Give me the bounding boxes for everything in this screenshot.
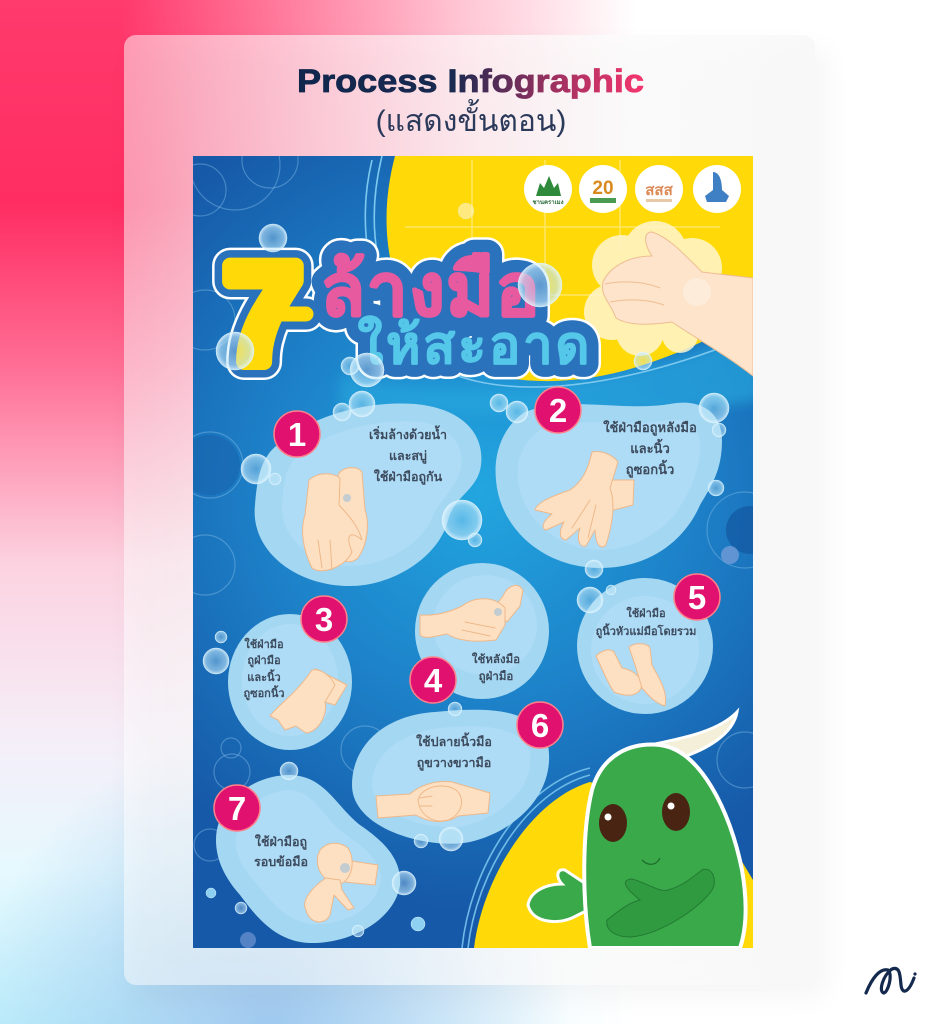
badge 1	[274, 411, 320, 457]
right arm	[607, 869, 714, 937]
bottom wave outlines	[462, 768, 590, 948]
step 1 text: เริ่มล้างด้วยน้ำ	[369, 425, 447, 442]
step 7 text: ใช้ฝ่ามือถู	[255, 834, 307, 850]
step 2 text	[603, 419, 697, 478]
sprout	[632, 712, 737, 758]
step 7 text	[254, 834, 308, 869]
mascot: green bean character	[528, 712, 746, 948]
subtitle: (แสดงขั้นตอน)	[376, 99, 566, 138]
panel: step 5	[577, 574, 720, 714]
wall tile lines	[405, 160, 720, 296]
hands illustration 6	[376, 782, 490, 822]
step 3 bubbles	[203, 631, 229, 674]
step 6 bubbles	[414, 702, 463, 851]
step 1 text: และสบู่	[389, 449, 427, 464]
panel: step 7	[206, 762, 425, 943]
bubble shape 4	[415, 563, 549, 699]
hands illustration 5	[596, 644, 666, 706]
logo 1: ชานคราเมง	[532, 199, 564, 206]
step 5 text	[596, 606, 696, 639]
bottom yellow shape	[474, 782, 753, 948]
hands illustration 7	[305, 843, 378, 922]
left eye	[599, 804, 627, 842]
badge 3: 3	[315, 601, 333, 638]
badge 7: 7	[228, 790, 246, 827]
step 6 text	[416, 732, 492, 771]
panel: poster	[193, 156, 753, 948]
step 4 text: ถูฝ่ามือ	[479, 670, 513, 684]
title outlines	[224, 235, 592, 392]
step 6 text: ถูขวางขวามือ	[417, 756, 491, 771]
body	[584, 745, 746, 948]
step 6 text: ใช้ปลายนิ้วมือ	[416, 732, 492, 749]
badge 2: 2	[549, 392, 567, 429]
step 5 text: ใช้ฝ่ามือ	[626, 606, 666, 620]
bubble shape 6	[352, 710, 549, 844]
panel: step 2	[490, 387, 729, 578]
title outlines: 7	[224, 235, 302, 392]
logo 3: สสส	[645, 182, 674, 199]
step 3 text	[243, 637, 285, 701]
bubble shape 1	[255, 403, 481, 586]
step 3 text: ถูฝ่ามือ	[247, 654, 281, 668]
step 4 text	[472, 652, 520, 684]
step 2 text: และนิ้ว	[630, 438, 670, 456]
lighter water band under title	[338, 344, 753, 410]
step 2 text: ถูซอกนิ้ว	[626, 459, 674, 478]
badge 7	[214, 785, 260, 831]
title line 2: ให้สะอาด	[358, 315, 592, 375]
wave outlines	[365, 156, 753, 387]
title outlines: ให้สะอาด	[358, 315, 592, 375]
title line 1: ล้างมือ	[321, 251, 541, 331]
title outlines: ล้างมือ	[321, 251, 541, 331]
decorative bubbles	[216, 203, 652, 387]
panel: step 1	[241, 391, 482, 586]
title outlines: ล้างมือ	[321, 251, 541, 331]
step 2 text: ใช้ฝ่ามือถูหลังมือ	[603, 419, 697, 436]
right eye	[662, 793, 690, 831]
step 1 text: ใช้ฝ่ามือถูกัน	[374, 469, 443, 485]
logo 1	[524, 165, 572, 213]
step 5 bubbles	[577, 585, 616, 613]
title art: 7 wash hands clean	[224, 235, 592, 392]
background bubble rings	[193, 156, 753, 948]
badge 6	[517, 702, 563, 748]
logo 2: 20	[592, 178, 614, 199]
logo 4	[693, 165, 741, 213]
card shadow	[130, 48, 828, 998]
big number 7: 7	[224, 235, 302, 392]
step 2 bubbles	[490, 393, 729, 578]
bubble shape 7	[216, 775, 400, 943]
badge 5: 5	[688, 579, 706, 616]
bubble shape 2	[496, 403, 722, 568]
badge 2	[535, 387, 581, 433]
badge 6: 6	[531, 707, 549, 744]
step 7 text: รอบข้อมือ	[254, 855, 308, 869]
bubble shape 5	[577, 578, 713, 714]
hands illustration 4	[420, 585, 523, 641]
left hand	[528, 870, 592, 922]
panel: white card	[124, 35, 815, 985]
title outlines: 7	[224, 235, 302, 392]
panel: step 6	[352, 702, 563, 851]
badge 3	[301, 596, 347, 642]
hands illustration 3	[270, 669, 347, 733]
badge 4: 4	[424, 662, 443, 699]
logo 2	[579, 165, 627, 213]
step 3 text: ใช้ฝ่ามือ	[244, 637, 284, 651]
badge 1: 1	[288, 416, 306, 453]
step 4 text: ใช้หลังมือ	[472, 652, 520, 666]
step 5 text: ถูนิ้วหัวแม่มือโดยรวม	[596, 623, 696, 639]
title outlines: ให้สะอาด	[358, 315, 592, 375]
step 1 text	[369, 425, 447, 485]
badge 5	[674, 574, 720, 620]
step 1 bubbles	[241, 391, 482, 547]
bubble shape 3	[228, 614, 352, 750]
logo 3	[635, 165, 683, 213]
title: Process Infographic	[297, 63, 644, 99]
panel: step 3	[203, 596, 352, 750]
hands illustration 2	[535, 451, 634, 547]
step 3 text: ถูซอกนิ้ว	[243, 685, 285, 701]
panel: step 4	[410, 563, 549, 703]
logos row	[524, 165, 741, 213]
smile	[642, 858, 660, 864]
step 3 text: และนิ้ว	[247, 669, 281, 684]
foam and top hand illustration	[584, 221, 753, 376]
brand logo mark	[866, 968, 917, 993]
yellow wall shape	[387, 156, 753, 381]
hands illustration 1	[303, 468, 367, 571]
step 7 bubbles	[206, 762, 425, 937]
